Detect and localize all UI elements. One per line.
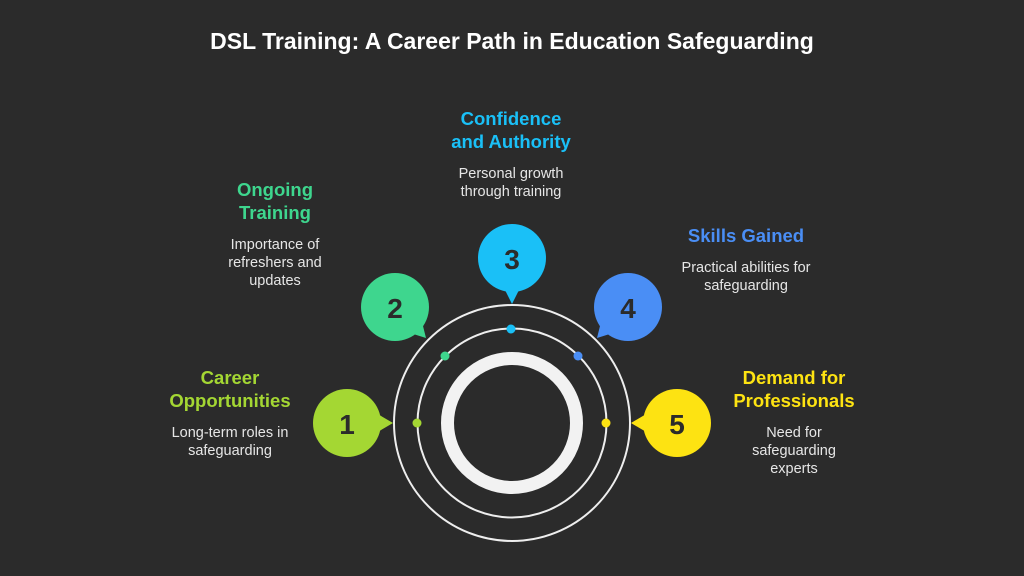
label 3: and Authority	[451, 131, 571, 152]
outer ring	[394, 305, 630, 541]
bubble 5: 5	[669, 409, 685, 440]
bubble 1	[313, 389, 393, 457]
label 1: Career	[201, 367, 259, 388]
middle ring	[418, 328, 606, 518]
label 4: Practical abilities for	[682, 260, 810, 276]
dots	[412, 324, 610, 428]
label 4	[682, 225, 810, 294]
label 3: Confidence	[461, 108, 561, 129]
title: DSL Training: A Career Path in Education Safeguarding	[210, 28, 814, 54]
label 5: Demand for	[743, 367, 845, 388]
label 2: Ongoing	[237, 179, 313, 200]
label 3: through training	[461, 184, 561, 200]
bubble 2	[361, 273, 429, 341]
label 4: safeguarding	[704, 278, 788, 294]
label 5: safeguarding	[752, 443, 836, 459]
bubble 2: 2	[387, 293, 403, 324]
inner thick ring	[448, 358, 576, 488]
label 5	[733, 367, 855, 477]
label 3: Personal growth	[459, 166, 563, 182]
label 1	[169, 367, 291, 459]
label 5: Professionals	[733, 390, 855, 411]
label 2	[228, 179, 322, 289]
label 1: Opportunities	[169, 390, 291, 411]
bubble 3	[478, 224, 546, 304]
label 2: refreshers and	[228, 255, 322, 271]
label 5: experts	[770, 461, 818, 477]
label 1: Long-term roles in	[172, 425, 288, 441]
label 1: safeguarding	[188, 443, 272, 459]
bubble 4: 4	[620, 293, 636, 324]
bubble 4	[594, 273, 662, 341]
label 5: Need for	[766, 425, 822, 441]
label 2: Training	[239, 202, 311, 223]
label 2: updates	[249, 273, 301, 289]
label 3	[451, 108, 571, 200]
bubble 3: 3	[504, 244, 520, 275]
bubble 5	[631, 389, 711, 457]
bubble 1: 1	[339, 409, 355, 440]
label 2: Importance of	[231, 237, 319, 253]
label 4: Skills Gained	[688, 225, 804, 246]
